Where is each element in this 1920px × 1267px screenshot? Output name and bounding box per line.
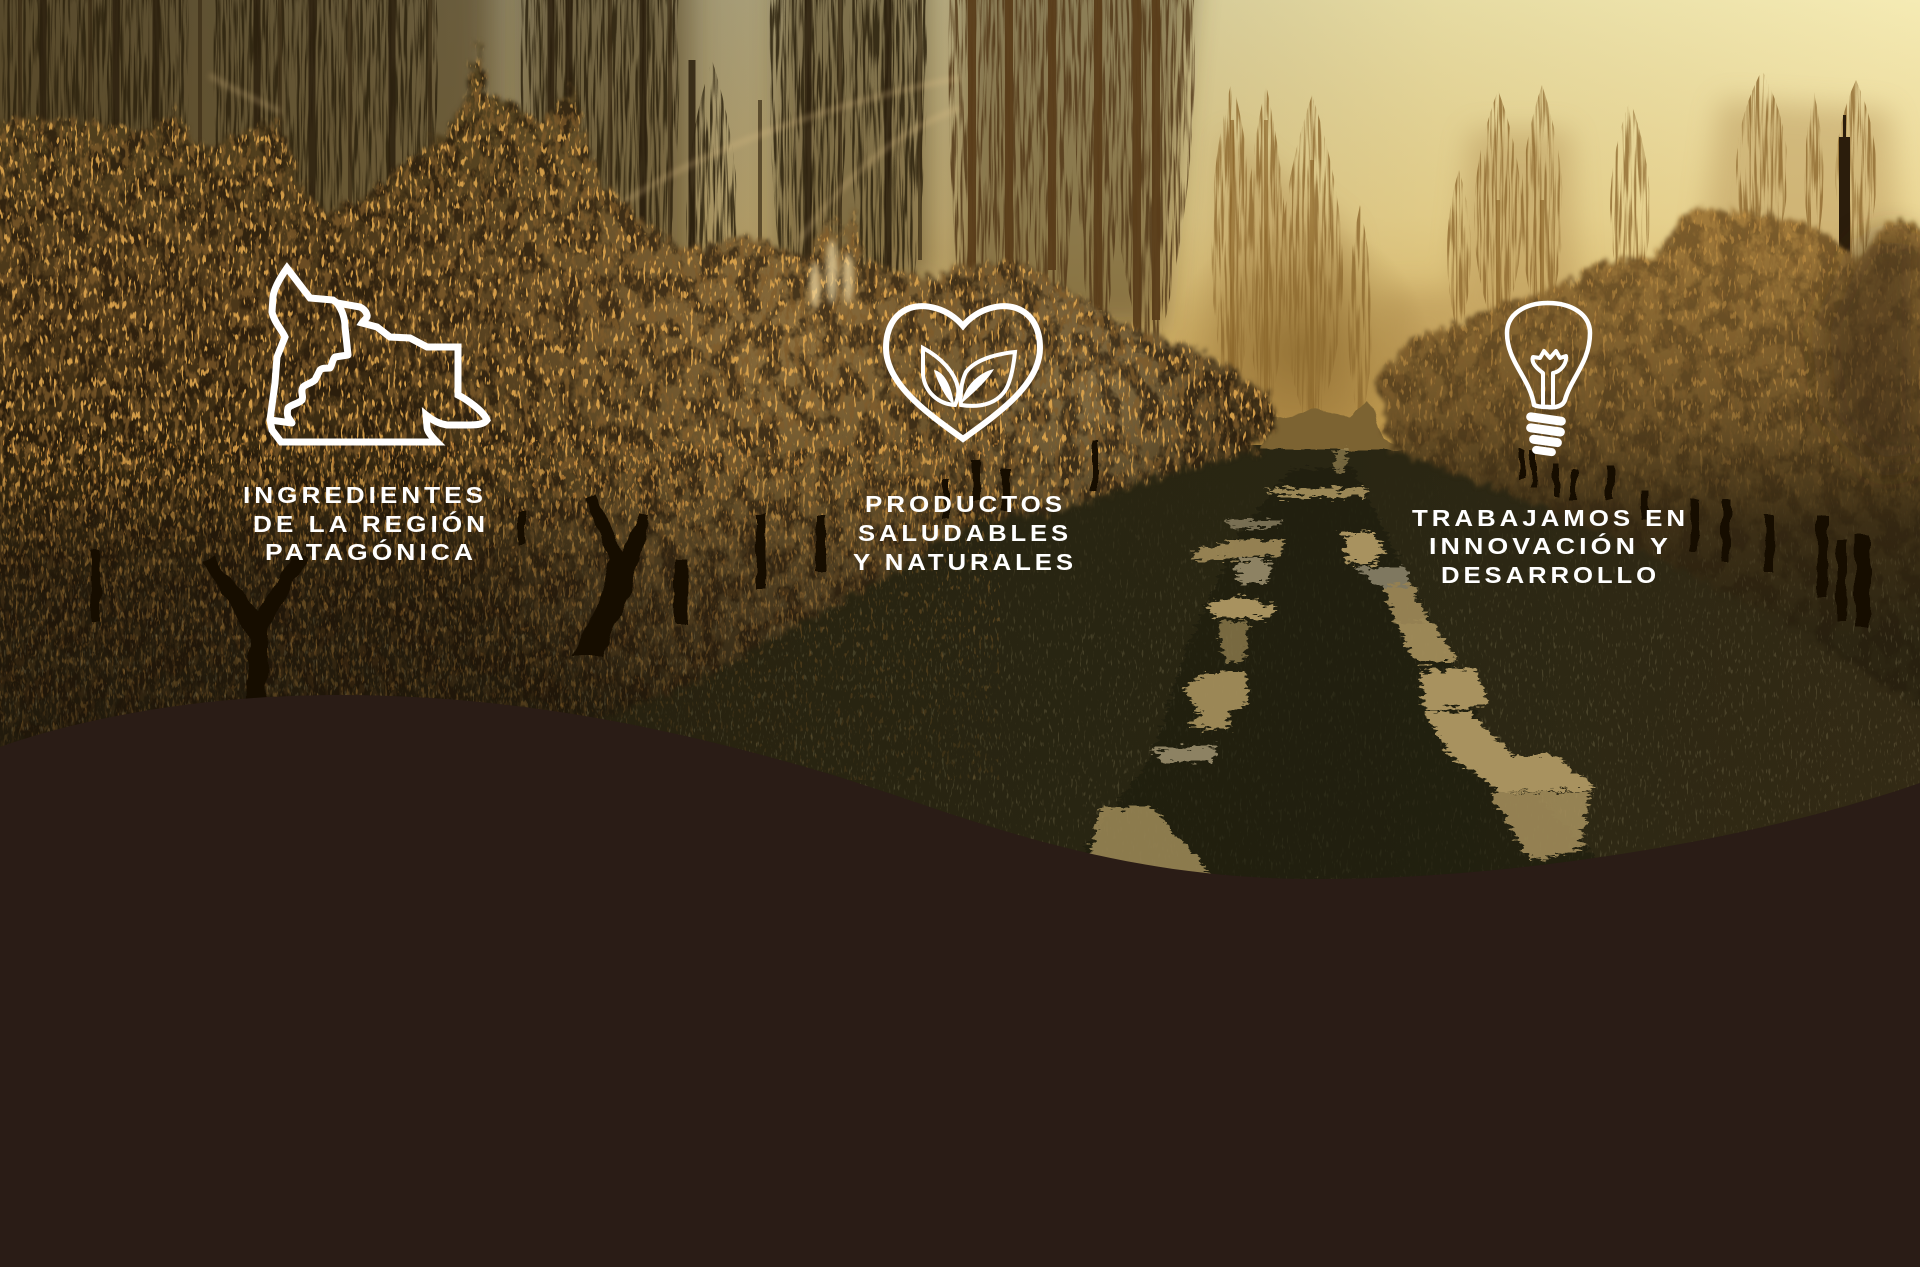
caption: ingredientes: PATAGÓNICA <box>265 538 477 565</box>
icon: heart with leaves <box>886 306 1040 439</box>
caption: ingredientes: INGREDIENTES <box>243 482 487 508</box>
infographic canvas <box>0 0 1920 879</box>
caption: productos: Y NATURALES <box>853 549 1077 575</box>
sky <box>0 0 1920 520</box>
faded distant poplars <box>1211 70 1900 440</box>
tall dark poplars <box>0 0 1195 440</box>
caption: trabajamos <box>1412 505 1689 588</box>
caption: ingredientes: DE LA REGIÓN <box>253 510 489 537</box>
grass highlights <box>0 440 1920 890</box>
left orchard mass <box>0 42 1278 743</box>
ground <box>0 445 1920 905</box>
bright sun-lit glints <box>810 240 853 309</box>
icon: patagonia map <box>270 268 487 442</box>
caption: trabajamos: TRABAJAMOS EN <box>1412 505 1689 531</box>
caption: productos: PRODUCTOS <box>865 491 1066 517</box>
sprinkler water arcs <box>210 75 960 240</box>
puddles <box>1086 450 1598 880</box>
caption: productos: SALUDABLES <box>858 520 1072 546</box>
dark brown wave panel <box>0 695 1920 1267</box>
muddy central track <box>1060 465 1620 880</box>
caption: trabajamos: DESARROLLO <box>1441 562 1660 588</box>
panel: trabajamos en innovación y desarrollo <box>1412 303 1689 588</box>
hazy distance glow <box>1130 200 1470 480</box>
icon: light bulb <box>1507 303 1590 457</box>
caption: productos <box>853 491 1077 575</box>
caption: trabajamos: INNOVACIÓN Y <box>1429 532 1672 559</box>
far bushes at end of track <box>1262 400 1420 450</box>
panel: productos saludables y naturales <box>853 306 1077 575</box>
right orchard mass <box>1372 204 1920 704</box>
panel: ingredientes de la región patagónica <box>243 268 489 565</box>
utility pole <box>1839 115 1850 270</box>
orchard tree trunks <box>90 440 1870 705</box>
dark upper branch of right tree <box>1820 230 1920 470</box>
caption: ingredientes <box>243 482 489 565</box>
photo background: orchard at sunrise <box>0 0 1920 905</box>
